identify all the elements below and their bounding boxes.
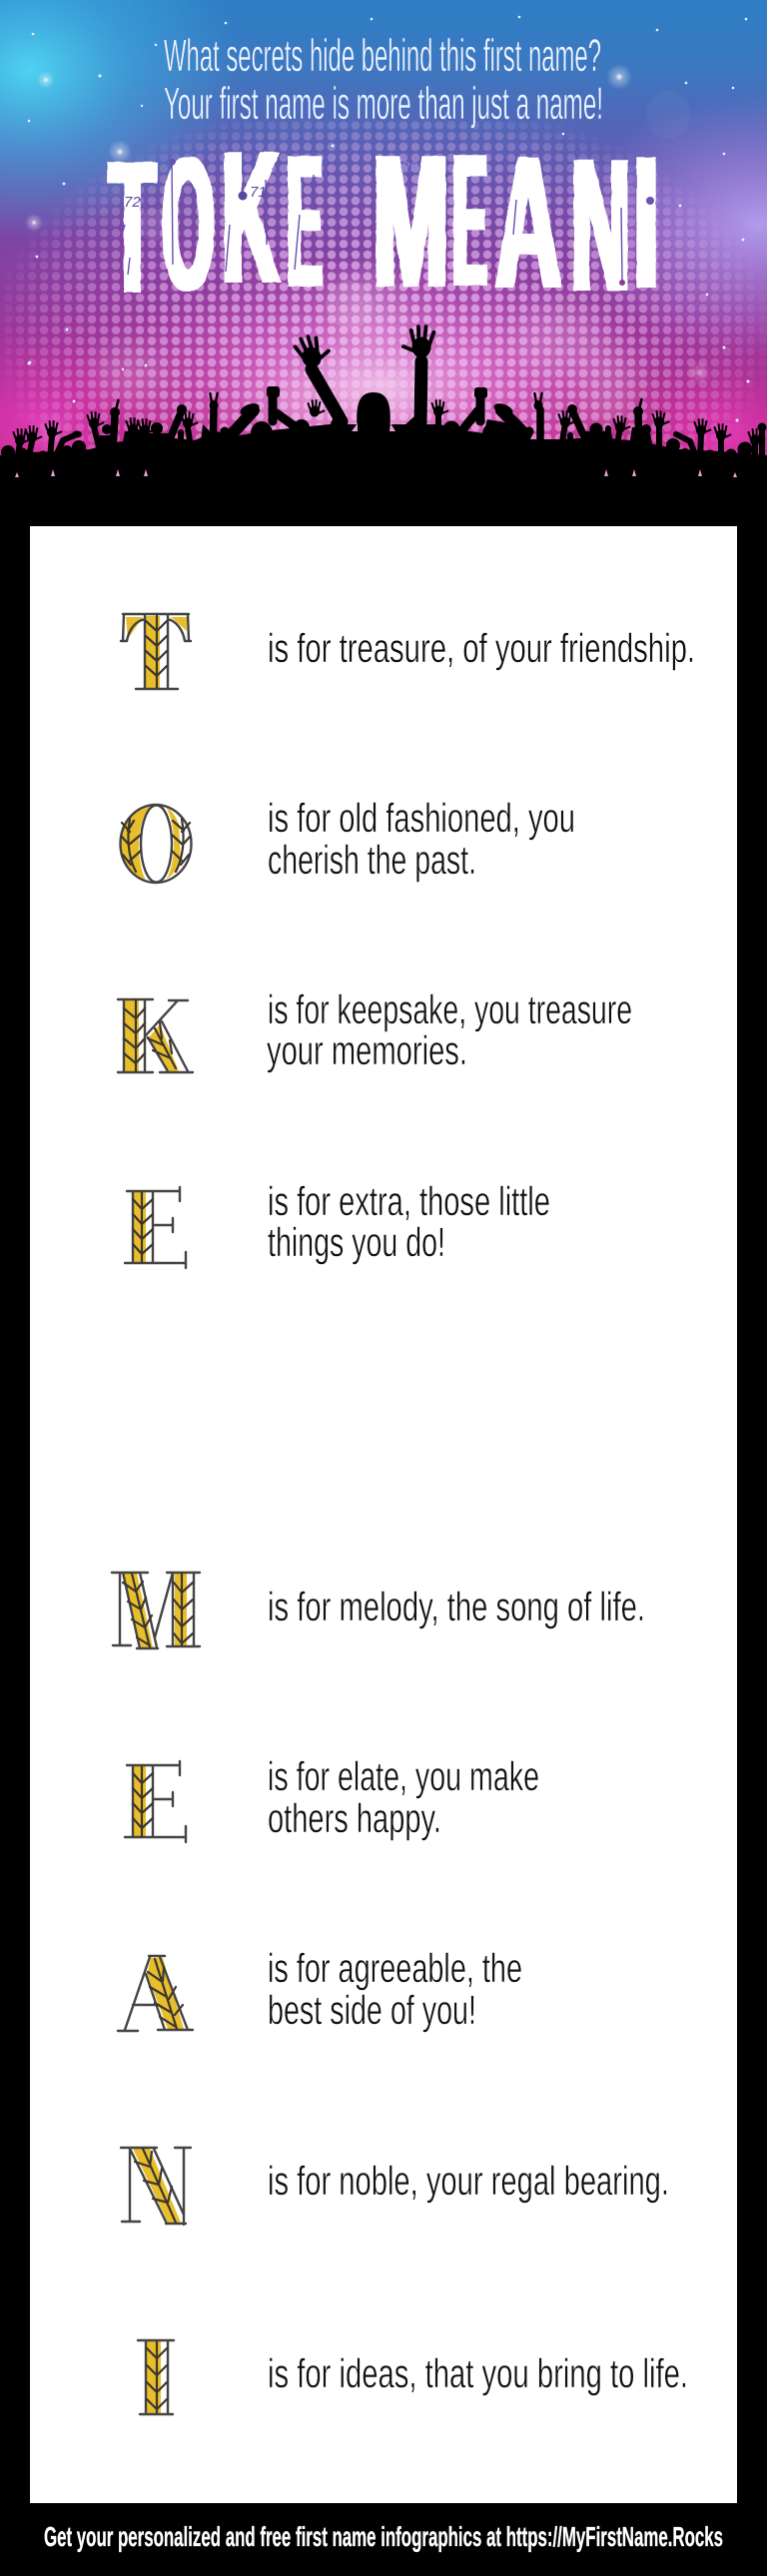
letter A (118, 1956, 193, 2031)
text E (268, 1178, 550, 1265)
row E (125, 1178, 550, 1268)
title: TOKE MEANI: I (633, 117, 659, 328)
title: TOKE MEANI: M (374, 115, 448, 327)
title distress marks: 71 (250, 184, 267, 201)
letter M (112, 1573, 200, 1648)
header background (0, 0, 767, 526)
text E second: others happy. (268, 1795, 441, 1841)
row A (118, 1945, 522, 2033)
main figure (294, 326, 435, 449)
letter N (121, 2148, 191, 2225)
crowd hands (14, 386, 767, 445)
letter K (118, 999, 193, 1072)
white content panel (30, 526, 737, 2503)
crowd silhouette (0, 326, 767, 529)
gaps in crowd (15, 423, 737, 477)
row O (120, 795, 575, 883)
text O (268, 795, 575, 883)
text A (268, 1945, 522, 2033)
row K (118, 986, 632, 1073)
dot matrix light wall (4, 121, 765, 451)
text A: is for agreeable, the (268, 1945, 522, 1991)
letter T (121, 614, 191, 689)
text K (267, 986, 632, 1073)
text E: things you do! (268, 1219, 445, 1265)
crowd arms (17, 395, 762, 461)
text E second: is for elate, you make (268, 1753, 539, 1799)
crowd heads and torsos (1, 419, 753, 469)
row E second (125, 1753, 539, 1842)
title: TOKE MEANI: E (453, 115, 486, 326)
row I (138, 2340, 688, 2414)
row M (112, 1573, 645, 1648)
text O: is for old fashioned, you (268, 795, 575, 841)
title distress marks: 72 (124, 194, 141, 211)
text E: is for extra, those little (268, 1178, 550, 1224)
text E second (268, 1753, 539, 1841)
text K: your memories. (267, 1027, 467, 1073)
title: TOKE MEANI (109, 111, 659, 333)
letter I (138, 2340, 174, 2414)
letter O (120, 805, 192, 883)
title distress marks: 29 (400, 159, 418, 176)
letter E (125, 1761, 186, 1842)
row T (121, 614, 695, 689)
title: TOKE MEANI: T (109, 121, 156, 333)
sparkles (25, 16, 749, 456)
title: TOKE MEANI: A (495, 116, 561, 328)
title: TOKE MEANI: N (571, 120, 630, 330)
text A: best side of you! (268, 1987, 476, 2033)
title distress marks (123, 159, 654, 286)
title: TOKE MEANI: O (163, 119, 214, 330)
row N (121, 2148, 669, 2225)
intro text (164, 30, 603, 129)
text O: cherish the past. (268, 837, 476, 883)
letter E (125, 1187, 186, 1268)
title: TOKE MEANI: E (288, 115, 322, 327)
title: TOKE MEANI: K (222, 111, 280, 322)
